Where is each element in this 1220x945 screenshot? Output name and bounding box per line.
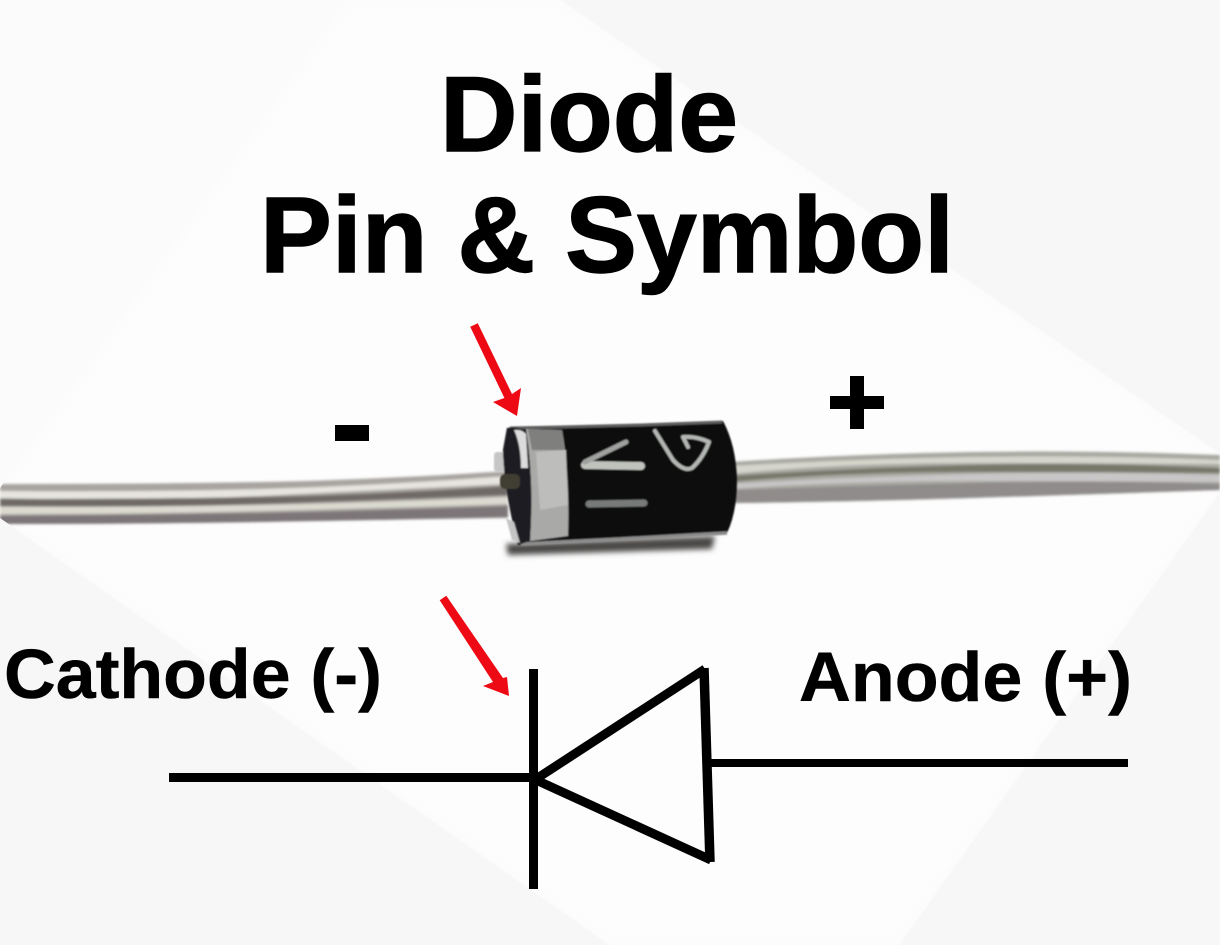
triangle: lower edge: [536, 780, 711, 860]
title: Diode: Diode: [440, 54, 738, 174]
right lead wire (anode): [730, 451, 1220, 503]
left end lug: [494, 452, 508, 472]
minus sign: cathode side of the photo: [335, 425, 369, 442]
label: Cathode (-): Cathode (-): [4, 635, 382, 713]
red arrow: pointing to symbol bar: [440, 596, 509, 696]
body shadow: [506, 536, 715, 555]
black cylinder: [503, 421, 737, 545]
silver cathode band: [526, 429, 568, 541]
diode body: [494, 421, 737, 545]
plus sign: anode side of the photo: [830, 376, 884, 429]
lower rim highlight: [521, 533, 727, 544]
cathode lead line: [169, 773, 533, 782]
cathode bar: [529, 669, 538, 889]
triangle: upper edge: [536, 669, 705, 779]
end face: [503, 428, 531, 545]
printed markings: [585, 431, 709, 504]
red arrow: pointing to cathode band: [470, 323, 521, 416]
anode lead line: [708, 759, 1128, 767]
diode schematic symbol: [169, 668, 1128, 889]
triangle: right edge: [704, 668, 710, 862]
left lead wire (cathode): [0, 471, 508, 524]
top rim highlight: [510, 422, 722, 428]
lead stub: [500, 474, 520, 489]
diode photograph: [0, 421, 1220, 555]
title: Pin & Symbol: Pin & Symbol: [260, 174, 954, 295]
label: Anode (+): Anode (+): [799, 638, 1132, 716]
